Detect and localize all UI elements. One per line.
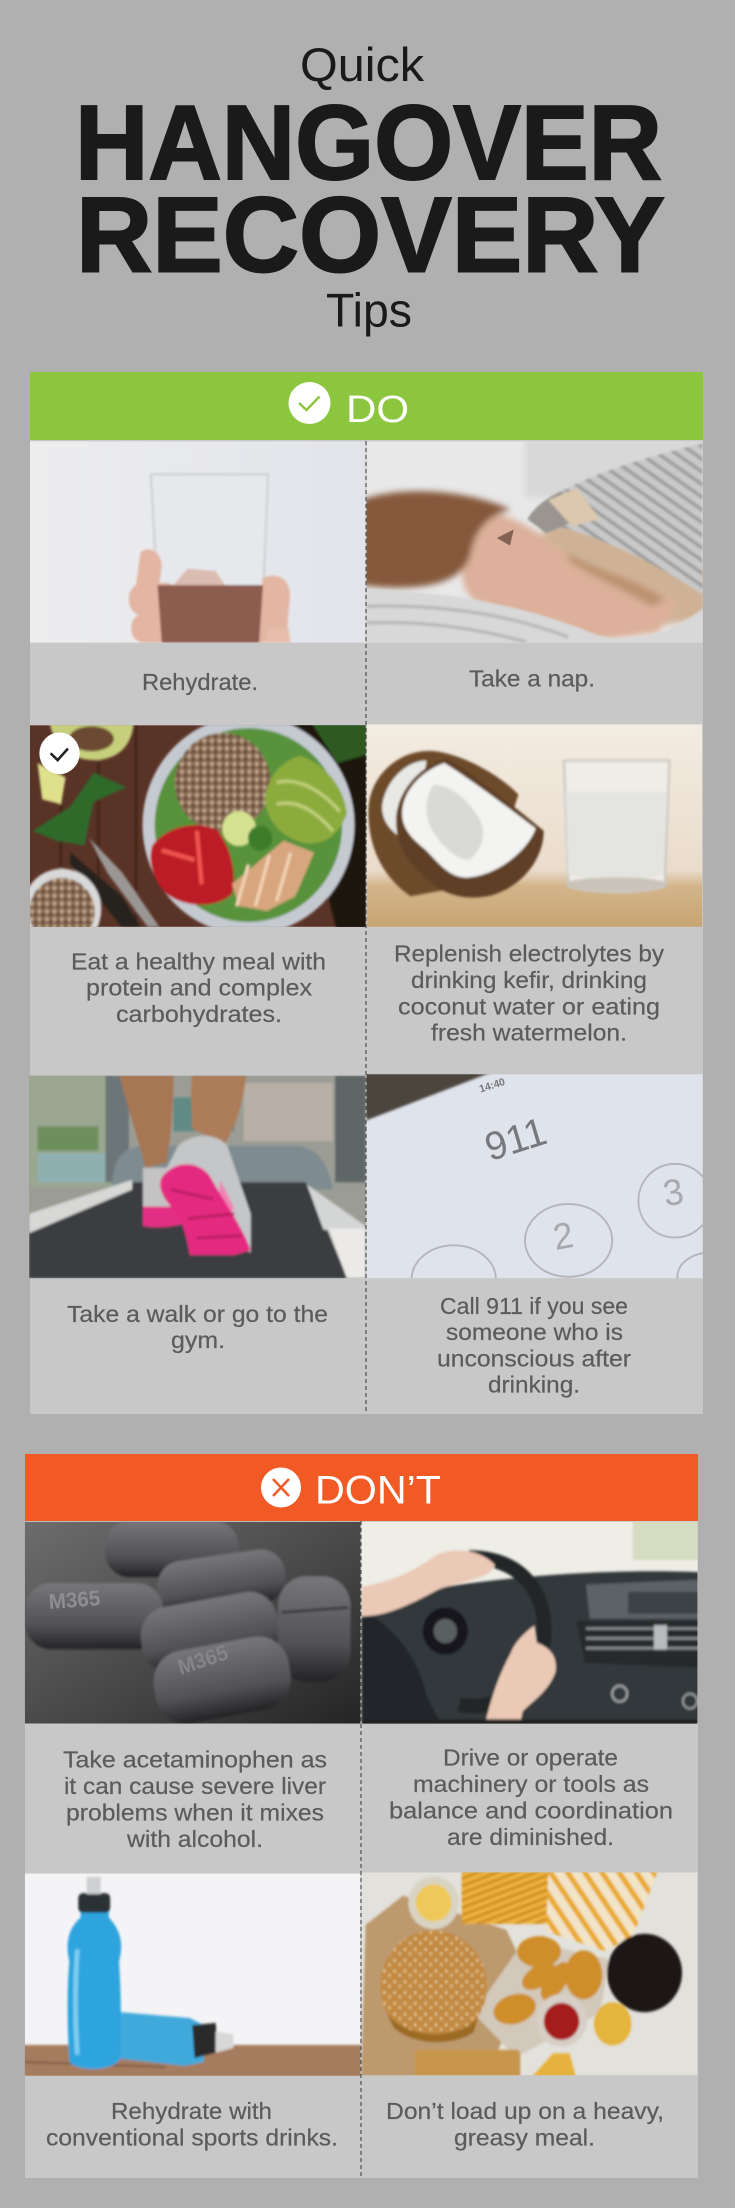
caption: replenish electrolytes: Replenish electrolytes by <box>394 940 665 966</box>
header: do: DO <box>346 389 409 431</box>
photo: greasy fast food <box>361 1869 698 2082</box>
caption: heavy meal <box>386 2098 664 2150</box>
caption: heavy meal: greasy meal. <box>454 2124 595 2150</box>
title: Quick <box>300 38 425 91</box>
caption: call 911: drinking. <box>488 1372 580 1398</box>
caption: rehydrate: Rehydrate. <box>142 669 258 695</box>
header: don't: DON’T <box>315 1468 441 1512</box>
photo: woman napping <box>361 437 712 647</box>
title: RECOVERY <box>76 174 665 294</box>
caption: call 911 <box>437 1293 631 1398</box>
title: Tips <box>326 284 412 336</box>
caption: healthy meal: protein and complex <box>86 974 313 1000</box>
caption: replenish electrolytes: drinking kefir, drinking <box>411 967 647 993</box>
photo: hand holding glass of water <box>30 441 366 643</box>
caption: drive: Drive or operate <box>443 1744 618 1770</box>
photo: phone dialing 911: 14:40 <box>478 1077 507 1096</box>
photo: acetaminophen pills: M365 <box>175 1641 231 1680</box>
caption: drive <box>389 1744 673 1850</box>
title: HANGOVER <box>75 84 662 202</box>
caption: take a nap: Take a nap. <box>469 666 595 692</box>
header: don't <box>25 1454 698 1521</box>
photo: hands on steering wheel <box>361 1518 703 1727</box>
caption: acetaminophen: Take acetaminophen as <box>63 1746 327 1772</box>
photo: walking on treadmill <box>29 1076 366 1278</box>
panel: don't <box>19 1454 703 2178</box>
caption: drive: balance and coordination <box>389 1798 673 1824</box>
caption: take a walk: gym. <box>171 1327 225 1353</box>
caption: drive: are diminished. <box>447 1824 614 1850</box>
title <box>75 38 665 336</box>
photo: coconut and coconut water <box>367 724 702 927</box>
caption: acetaminophen: it can cause severe liver <box>64 1773 326 1799</box>
header: do <box>30 372 703 440</box>
photo: acetaminophen pills <box>25 1521 360 1729</box>
caption: healthy meal: carbohydrates. <box>116 1001 282 1027</box>
caption: acetaminophen: with alcohol. <box>126 1826 263 1852</box>
photo: phone dialing 911 <box>366 1074 702 1278</box>
caption: sports drinks: conventional sports drinks. <box>46 2124 338 2150</box>
photo: phone dialing 911: 3 <box>660 1170 687 1215</box>
caption: drive: machinery or tools as <box>413 1771 649 1797</box>
caption: healthy meal: Eat a healthy meal with <box>71 948 326 974</box>
caption: call 911: someone who is <box>446 1319 623 1345</box>
photo: blue sports drinks <box>19 1873 366 2079</box>
photo: phone dialing 911: 911 <box>480 1110 552 1170</box>
caption: call 911: unconscious after <box>437 1346 631 1372</box>
caption: replenish electrolytes: fresh watermelon. <box>431 1020 627 1046</box>
icon: check badge <box>39 732 80 774</box>
caption: take a walk: Take a walk or go to the <box>67 1301 328 1327</box>
caption: call 911: Call 911 if you see <box>440 1293 628 1319</box>
photo: phone dialing 911: 2 <box>550 1214 576 1258</box>
caption: replenish electrolytes: coconut water or eating <box>398 994 660 1020</box>
caption: sports drinks <box>46 2098 338 2150</box>
caption: replenish electrolytes <box>394 940 665 1046</box>
photo: acetaminophen pills: M365 <box>48 1587 101 1614</box>
caption: take a walk <box>67 1301 328 1353</box>
caption: heavy meal: Don’t load up on a heavy, <box>386 2098 664 2124</box>
caption: acetaminophen <box>63 1746 327 1852</box>
caption: healthy meal <box>71 948 326 1027</box>
panel: do <box>22 372 735 1414</box>
caption: acetaminophen: problems when it mixes <box>66 1800 324 1826</box>
caption: sports drinks: Rehydrate with <box>111 2098 272 2124</box>
photo: healthy meal bowl <box>30 725 366 927</box>
